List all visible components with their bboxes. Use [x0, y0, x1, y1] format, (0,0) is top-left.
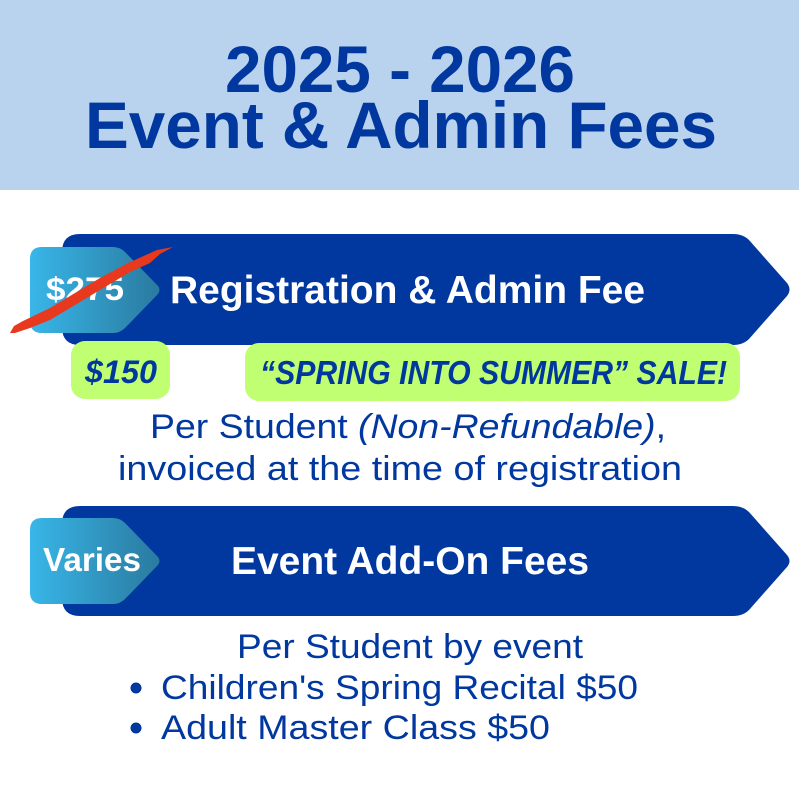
- title: Event & Admin Fees: [85, 88, 717, 162]
- list item: recital: Children's Spring Recital $50: [161, 669, 638, 707]
- text: registration details: Per Student (Non-Refundable) ,: [150, 408, 666, 446]
- heading: add-on: Event Add-On Fees: [231, 540, 589, 583]
- banner: registration: [62, 234, 790, 345]
- badge: sale name: “SPRING INTO SUMMER” SALE!: [260, 354, 727, 391]
- badge: old price: $275: [46, 271, 124, 307]
- badge: sale price: $150: [84, 354, 157, 390]
- heading: registration: Registration & Admin Fee: [170, 269, 645, 312]
- panel: event add-on fees: [30, 506, 790, 747]
- title band: [0, 0, 799, 190]
- banner: add-on: [62, 506, 790, 616]
- text: add-on details: [130, 628, 638, 747]
- badge: varies: Varies: [43, 541, 141, 578]
- icon: red strikethrough: [10, 247, 173, 333]
- badge: sale name: [245, 343, 740, 401]
- panel: registration fee: [10, 234, 790, 488]
- badge: old price: [30, 247, 160, 333]
- list item: master class: Adult Master Class $50: [161, 709, 550, 747]
- text: registration details: invoiced at the time of registration: [118, 450, 682, 488]
- badge: sale price: [71, 341, 170, 399]
- text: add-on details: Per Student by event: [237, 628, 584, 666]
- badge: varies: [30, 518, 160, 604]
- text: registration details: [118, 408, 682, 488]
- title: [85, 32, 717, 162]
- title: 2025 - 2026: [225, 32, 575, 106]
